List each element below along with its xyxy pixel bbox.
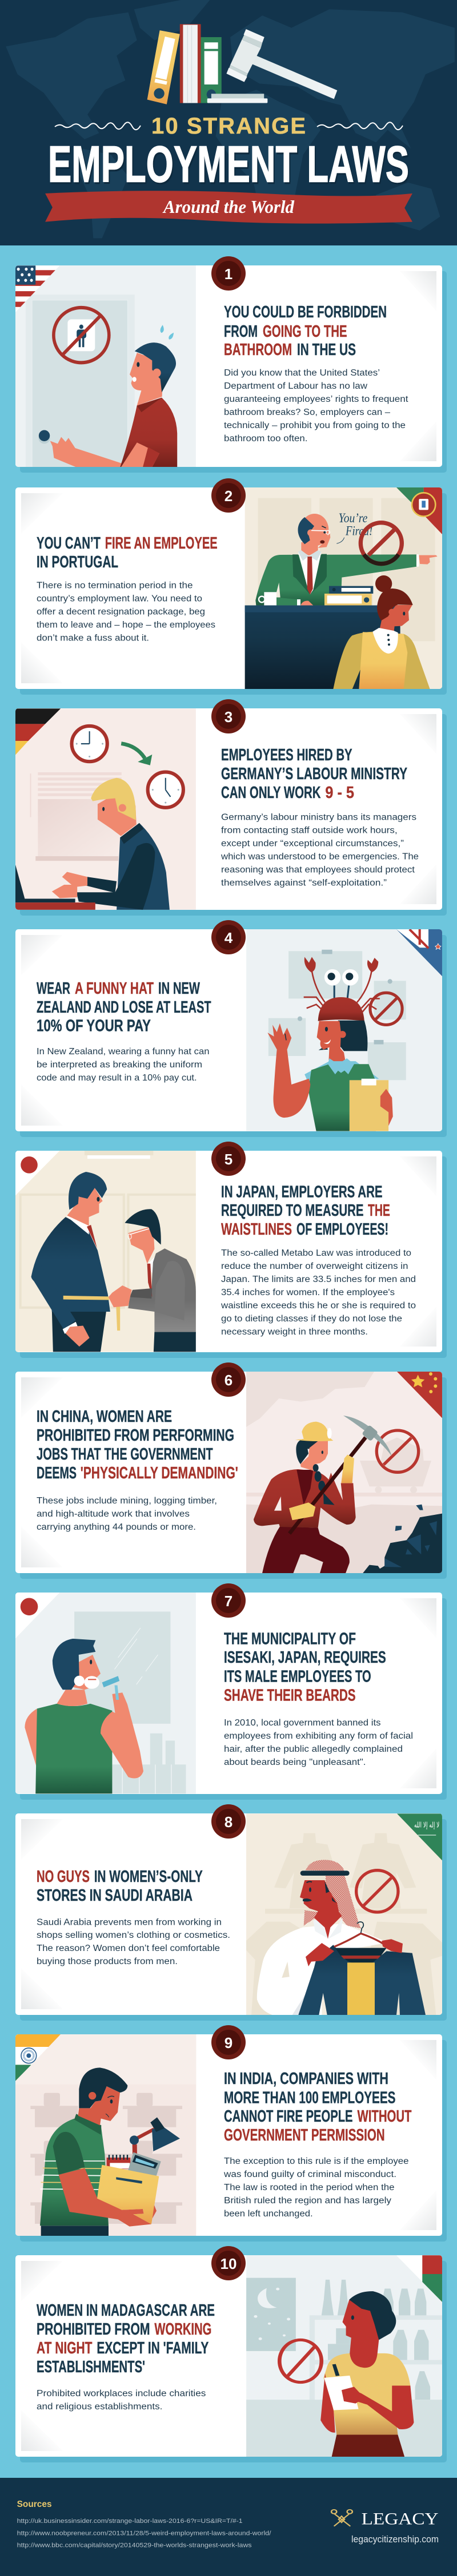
illustration: woman with crab hat [246, 927, 444, 1131]
card shell [15, 1151, 447, 1358]
shelves and bottles [310, 2280, 442, 2400]
body text: Did you know that the United States’ [224, 368, 380, 378]
body text: In New Zealand, wearing a funny hat can [37, 1047, 209, 1057]
illustration: woman miner [246, 1372, 443, 1573]
icon: clock nine [72, 726, 107, 761]
body text: Prohibited workplaces include charities [37, 2389, 206, 2398]
icon: green binder [201, 37, 222, 103]
coal pile [363, 1505, 442, 1573]
body text: which was understood to be emergencies. The [221, 852, 419, 862]
icon: no sign [376, 1430, 419, 1472]
number badge 6 [211, 1362, 246, 1397]
icon: calculator [128, 2152, 161, 2176]
laptop and desk [15, 864, 95, 910]
body text: In 2010, local government banned its [224, 1718, 381, 1728]
heading: ITS MALE EMPLOYEES TO [224, 1667, 371, 1686]
desk [245, 606, 400, 689]
number badge 4: 4 [225, 929, 233, 946]
icon: no sign [356, 1870, 398, 1912]
body text: guaranteeing employees’ rights to frequent [224, 394, 408, 404]
flag: Madagascar [396, 2255, 442, 2302]
body text: necessary weight in three months. [221, 1327, 368, 1337]
number badge 2 [211, 478, 246, 513]
footer [0, 2478, 457, 2576]
source links [17, 2518, 272, 2549]
body text: The law is rooted in the period when the [224, 2183, 394, 2192]
panel: law 2 Portugal [15, 478, 447, 695]
heading [37, 979, 211, 1035]
woman figure [254, 1422, 366, 1573]
body text: The reason? Women don’t feel comfortable [37, 1944, 220, 1953]
heading: A FUNNY HAT [75, 979, 154, 998]
card shell [15, 265, 447, 473]
icon: desk lamp [130, 2117, 180, 2154]
icon: no sign [360, 523, 402, 564]
background shelves [30, 2093, 182, 2224]
heading: 'PHYSICALLY DEMANDING' [81, 1464, 238, 1482]
source links: http://uk.businessinsider.com/strange-labor-laws-2016-6?r=US&IR=T/#-1 [17, 2518, 243, 2525]
number badge 3: 3 [225, 708, 232, 725]
heading: IN WOMEN’S-ONLY [94, 1868, 203, 1886]
heading: NO GUYS [37, 1868, 90, 1886]
woman figure [320, 2291, 414, 2457]
toiletries [112, 1734, 186, 1793]
heading: PROHIBITED FROM PERFORMING [37, 1426, 234, 1445]
panel: law 5 Japan waistlines [15, 1142, 447, 1358]
body text: British ruled the region and has largely [224, 2196, 391, 2206]
body text: country’s employment law. You need to [37, 594, 202, 604]
ribbon subtitle: Around the World [162, 196, 295, 217]
flag: Saudi Arabia [397, 1813, 442, 1860]
icon: no sign [279, 2340, 322, 2383]
panel: law 4 New Zealand [15, 920, 447, 1137]
illustration: man carrying box [15, 2034, 196, 2236]
number badge 5: 5 [225, 1151, 232, 1168]
body text: Germany’s labour ministry bans its managers [221, 813, 416, 823]
body text: bathroom too often. [224, 434, 307, 444]
icon: yellow binder [147, 30, 180, 104]
card shell [15, 1372, 447, 1579]
number badge 3 [211, 699, 246, 733]
man figure [40, 2067, 151, 2236]
number badge 7: 7 [225, 1593, 232, 1610]
number badge 8: 8 [225, 1813, 232, 1831]
body text: There is no termination period in the [37, 581, 193, 590]
number badge 7 [211, 1583, 246, 1618]
illustration: man at laptop with clocks [15, 708, 196, 910]
body text: go to dieting classes if they do not lose the [221, 1314, 402, 1324]
background clothes [246, 1833, 442, 2015]
panel: law 9 India [15, 2025, 447, 2242]
pickaxe [343, 1416, 392, 1456]
body text: buying those products from men. [37, 1957, 178, 1966]
heading: IN THE US [297, 341, 356, 359]
body text: don’t make a fuss about it. [37, 634, 149, 643]
body text: Japan. The limits are 33.5 inches for men and [221, 1275, 416, 1284]
heading [224, 2070, 412, 2144]
crab hat [304, 957, 380, 1021]
heading: JOBS THAT THE GOVERNMENT [37, 1445, 213, 1464]
source links: http://www.noobpreneur.com/2013/11/28/5-weird-employment-laws-around-world/ [17, 2530, 272, 2537]
man figure [50, 325, 177, 467]
body text: reduce the number of overweight citizens in [221, 1261, 408, 1271]
speech: You're Fired! [339, 514, 372, 535]
body text: them to leave and – hope – the employees [37, 620, 215, 630]
icon: binders [324, 586, 373, 606]
body text [224, 368, 408, 444]
body text: from contacting staff outside work hours, [221, 826, 398, 836]
heading [224, 1630, 386, 1705]
panel: law 8 Saudi Arabia [15, 1804, 447, 2021]
body text: about beards being "unpleasant". [224, 1757, 366, 1767]
decorative wave right [317, 122, 403, 130]
heading: WORKING [154, 2320, 211, 2339]
heading [224, 303, 387, 359]
brand url: legacycitizenship.com [351, 2534, 439, 2545]
body text [37, 2389, 206, 2412]
man figure [52, 778, 170, 910]
body text [37, 1047, 209, 1083]
man figure [25, 1639, 143, 1793]
body text: be interpreted as breaking the uniform [37, 1060, 202, 1070]
heading [221, 1183, 390, 1239]
body text [224, 1718, 413, 1767]
body text: carrying anything 44 pounds or more. [37, 1522, 196, 1532]
heading [221, 746, 407, 802]
flag: China [397, 1372, 442, 1418]
panel: law 1 bathroom [15, 256, 447, 473]
card shell [15, 487, 447, 695]
icon: no sign [370, 993, 402, 1025]
body text: and religious establishments. [37, 2402, 162, 2412]
panel: law 7 Isesaki beards [15, 1583, 447, 1800]
icon: gavel [207, 29, 337, 103]
header banner [0, 0, 457, 245]
arrow [121, 744, 152, 765]
heading [37, 1868, 203, 1905]
tall man [31, 1172, 110, 1352]
card shell [15, 1813, 447, 2021]
number badge 8 [211, 1804, 246, 1839]
world map backdrop [6, 0, 455, 238]
source links: http://www.bbc.com/capital/story/20140529-the-worlds-strangest-work-laws [17, 2542, 252, 2549]
body text: been left unchanged. [224, 2209, 313, 2219]
heading: ZEALAND AND LOSE AT LEAST [37, 998, 211, 1017]
boss figure [255, 514, 438, 606]
heading: BATHROOM [224, 341, 292, 359]
ribbon [45, 191, 412, 224]
brand name: LEGACY [362, 2510, 439, 2529]
heading: 9 - 5 [325, 784, 354, 802]
body text: technically – prohibit you from going to the [224, 421, 406, 430]
heading: STORES IN SAUDI ARABIA [37, 1886, 193, 1905]
icon: clock five [148, 772, 183, 808]
icon: notebook [107, 2155, 130, 2169]
body text: 35.4 inches for women. If the employee's [221, 1288, 395, 1297]
icon: red book [180, 24, 201, 103]
body text: These jobs include mining, logging timber, [37, 1496, 217, 1506]
body text [221, 1248, 416, 1337]
body text: except under “exceptional circumstances,” [221, 839, 404, 849]
heading [37, 534, 218, 571]
icon: Legacy crossed keys [331, 2510, 352, 2526]
body text: Saudi Arabia prevents men from working in [37, 1917, 222, 1927]
heading: MORE THAN 100 EMPLOYEES [224, 2089, 395, 2107]
number badge 1 [211, 256, 246, 291]
heading: SHAVE THEIR BEARDS [224, 1687, 356, 1705]
body text: hair, after the public allegedly complained [224, 1744, 403, 1754]
body text: waistline exceeds this he or she is required to [221, 1301, 416, 1311]
card shell [15, 2034, 447, 2242]
mine cart [360, 1437, 431, 1493]
body text: was found guilty of criminal misconduct. [223, 2170, 396, 2179]
short man [109, 1209, 196, 1352]
heading: IN JAPAN, EMPLOYERS ARE [221, 1183, 383, 1201]
body text: The so-called Metabo Law was introduced to [221, 1248, 411, 1258]
heading: AT NIGHT [37, 2339, 93, 2357]
body text [37, 1917, 230, 1966]
woman figure [333, 575, 430, 689]
man figure [257, 1860, 388, 2015]
title line: 10 strange: 10 STRANGE [151, 114, 306, 139]
heading: FROM [224, 322, 258, 341]
heading: ESTABLISHMENTS' [37, 2358, 145, 2376]
number badge 9: 9 [225, 2034, 232, 2051]
sources heading: Sources [17, 2500, 52, 2509]
heading: THE MUNICIPALITY OF [224, 1630, 356, 1648]
card shell [15, 2255, 447, 2462]
body text: employees from exhibiting any form of facial [224, 1731, 413, 1741]
panel: law 3 Germany [15, 699, 447, 916]
heading: EXCEPT IN 'FAMILY [97, 2339, 209, 2357]
decorative wave left [55, 122, 141, 130]
flag: New Zealand [396, 929, 442, 976]
illustration: boss firing an employee [245, 485, 445, 691]
illustration: man shaving [15, 1593, 196, 1793]
night window [246, 2278, 296, 2351]
heading: 10% OF YOUR PAY [37, 1017, 151, 1035]
flag: Germany [15, 708, 61, 755]
illustration: man at bathroom door [15, 265, 196, 467]
card shell [15, 929, 447, 1137]
garment on hanger [298, 1922, 426, 2015]
mirror [74, 1611, 170, 1724]
flag: India [15, 2034, 61, 2081]
woman figure [267, 1021, 393, 1131]
flag: Saudi Arabia: لا إله إلا الله [414, 1821, 439, 1830]
illustration: woman at shop at night [246, 2255, 444, 2457]
body text: reasoning was that employees should protect [221, 865, 415, 875]
flag: Japan [15, 1151, 60, 1196]
panel: law 6 China [15, 1362, 447, 1579]
card shell [15, 1593, 447, 1800]
heading: REQUIRED TO MEASURE [221, 1202, 363, 1220]
measuring tape [63, 1296, 120, 1331]
heading: IN INDIA, COMPANIES WITH [224, 2070, 388, 2088]
heading: PROHIBITED FROM [37, 2320, 150, 2339]
heading: CANNOT FIRE PEOPLE [224, 2107, 353, 2126]
notes on wall [268, 950, 406, 1080]
body text [37, 1496, 217, 1532]
window with blinds [30, 772, 122, 861]
flag: Japan [15, 1593, 60, 1639]
heading: WITHOUT [358, 2107, 412, 2126]
heading: WEAR [37, 979, 70, 998]
heading: EMPLOYEES HIRED BY [221, 746, 352, 764]
number badge 1: 1 [225, 265, 232, 283]
illustration: man holding garment [246, 1813, 443, 2015]
heading: WAISTLINES [221, 1220, 292, 1239]
number badge 10 [211, 2246, 246, 2280]
icon: no toilet sign [54, 308, 109, 362]
number badge 2: 2 [225, 487, 232, 505]
body text [223, 2156, 409, 2219]
heading: GOING TO THE [263, 322, 347, 341]
heading: IN CHINA, WOMEN ARE [37, 1408, 172, 1426]
body text: code and may result in a 10% pay cut. [37, 1073, 197, 1083]
body text: Department of Labour has no law [224, 381, 368, 391]
number badge 9 [211, 2025, 246, 2059]
heading: THE [368, 1202, 390, 1220]
number badge 10: 10 [221, 2255, 236, 2272]
heading: YOU CAN’T [37, 534, 101, 553]
icon: mug [259, 592, 276, 606]
body text: shops selling women’s clothing or cosmetics. [37, 1930, 230, 1940]
body text [221, 813, 419, 888]
heading: WOMEN IN MADAGASCAR ARE [37, 2301, 215, 2320]
heading [37, 1408, 238, 1482]
speech: You're Fired!: Fired! [345, 523, 372, 538]
heading: DEEMS [37, 1464, 77, 1482]
body text: bathroom breaks? So, employers can – [224, 408, 390, 417]
heading: GOVERNMENT PERMISSION [224, 2126, 385, 2144]
number badge 5 [211, 1142, 246, 1176]
flag: Portugal [396, 487, 442, 534]
heading: FIRE AN EMPLOYEE [105, 534, 218, 553]
heading: IN PORTUGAL [37, 553, 118, 571]
number badge 4 [211, 920, 246, 954]
body text: offer a decent resignation package, beg [37, 607, 205, 616]
icon: books and gavel [147, 24, 337, 104]
body text [37, 581, 215, 643]
heading: IN NEW [158, 979, 200, 998]
heading: ISESAKI, JAPAN, REQUIRES [224, 1648, 386, 1667]
illustration: employer measuring waist [15, 1151, 196, 1352]
number badge 6: 6 [225, 1372, 232, 1389]
heading: OF EMPLOYEES! [296, 1220, 388, 1239]
speech: You're Fired!: You’re [339, 511, 367, 526]
heading: YOU COULD BE FORBIDDEN [224, 303, 387, 321]
body text: The exception to this rule is if the employee [224, 2156, 409, 2166]
body text: and high-altitude work that involves [37, 1509, 190, 1519]
heading: CAN ONLY WORK [221, 784, 321, 802]
flag: USA [15, 265, 62, 313]
heading [37, 2301, 215, 2376]
body text: themselves against “self-exploitation.” [221, 878, 387, 888]
icon: cardboard box [97, 2165, 159, 2224]
panel: law 10 Madagascar [15, 2246, 447, 2462]
card shell [15, 708, 447, 916]
